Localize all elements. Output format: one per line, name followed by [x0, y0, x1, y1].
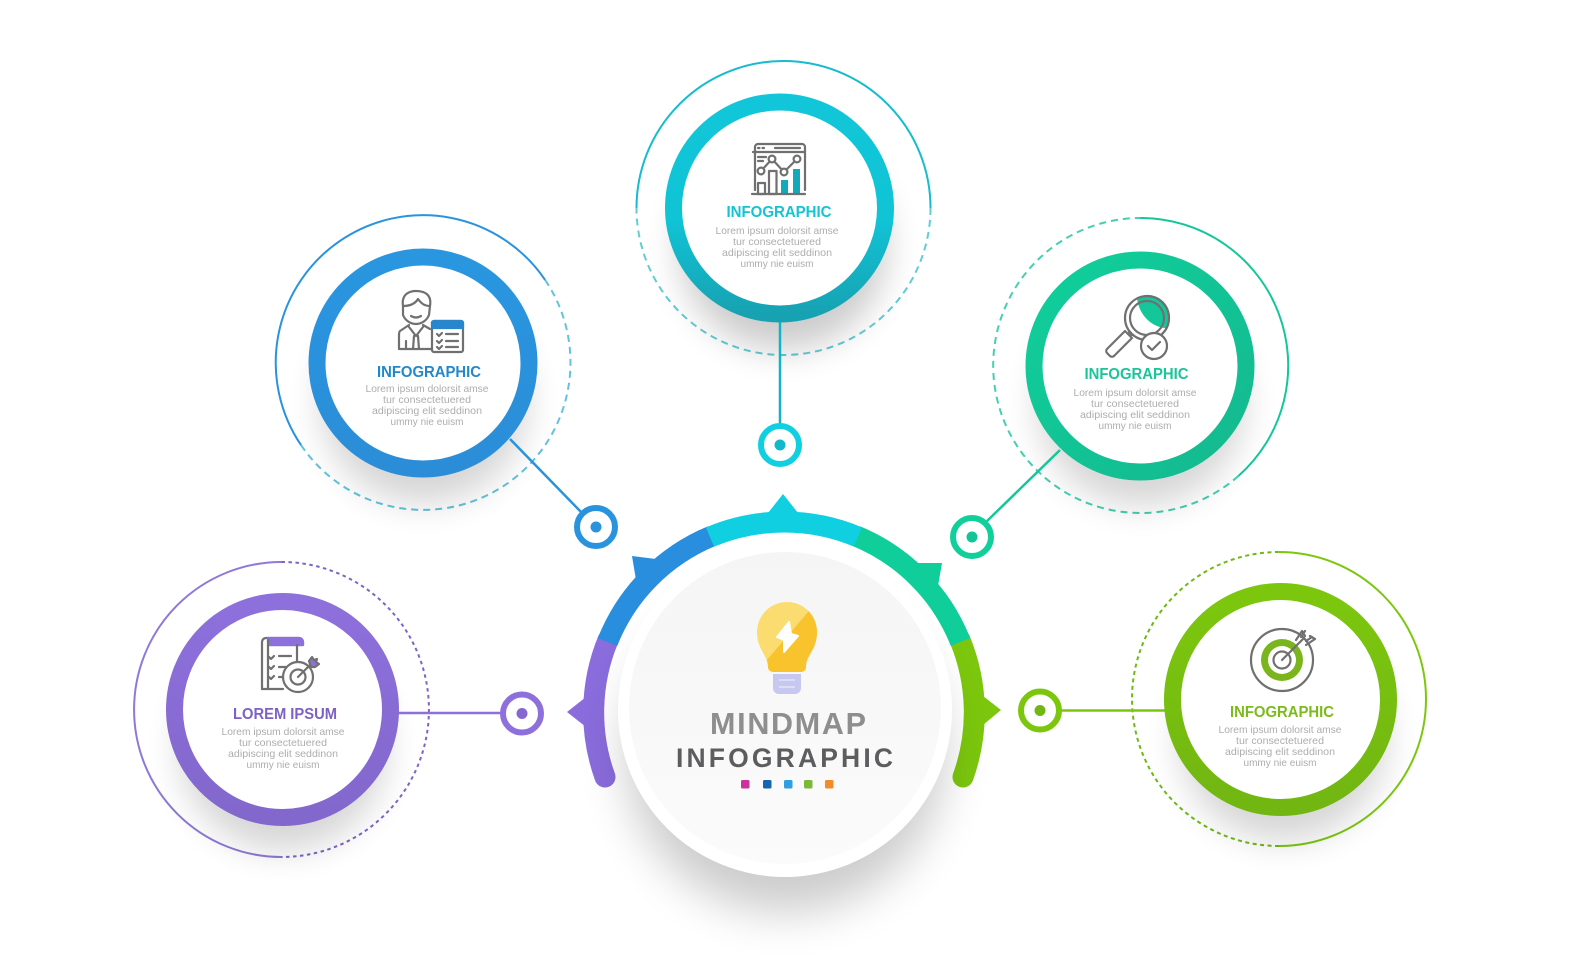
icon: magnifier with check	[1106, 295, 1170, 359]
text block: blue: ummy nie euism	[390, 417, 464, 428]
text block: lime: ummy nie euism	[1244, 758, 1316, 769]
shadow: cyan node	[679, 142, 887, 350]
text block: cyan: ummy nie euism	[740, 259, 814, 270]
outer orbit: green	[993, 218, 1288, 513]
panel: cyan node	[636, 61, 930, 464]
text block: lime: Lorem ipsum dolorsit amse	[1218, 725, 1342, 736]
ring: purple	[174, 602, 390, 818]
icon: web chart	[752, 144, 805, 194]
panel: lime node	[1021, 552, 1426, 846]
ring: cyan	[674, 102, 886, 314]
panel: central hub	[567, 494, 1001, 912]
text block: blue: adipiscing elit seddinon	[372, 406, 482, 417]
text block: cyan: tur consectetuered	[733, 237, 821, 248]
icon: light bulb	[757, 602, 817, 694]
hub shadow	[625, 592, 945, 912]
text block: blue: tur consectetuered	[383, 395, 471, 406]
text block: green: tur consectetuered	[1091, 399, 1179, 410]
text block: purple: adipiscing elit seddinon	[228, 749, 338, 760]
ring: lime	[1172, 592, 1388, 808]
heading: green: INFOGRAPHIC	[1084, 366, 1188, 383]
text block: lime	[1218, 725, 1342, 769]
text block: cyan	[716, 226, 839, 270]
shadow: lime node	[1179, 633, 1387, 841]
colour squares	[741, 780, 834, 788]
connector: cyan	[779, 320, 781, 425]
title: mindmap: MINDMAP	[710, 707, 866, 741]
outer orbit: lime	[1132, 552, 1426, 846]
text block: purple	[222, 727, 345, 771]
connector dot: lime	[1021, 692, 1059, 730]
connector dot: green	[953, 518, 991, 556]
panel: blue node	[276, 215, 615, 546]
ring: blue	[317, 257, 529, 469]
icon: target with arrow	[1251, 629, 1315, 691]
text block: blue: Lorem ipsum dolorsit amse	[366, 384, 489, 395]
text block: blue	[366, 384, 489, 428]
connector: blue	[510, 439, 582, 513]
shadow: green node	[1037, 298, 1245, 506]
text block: lime: tur consectetuered	[1236, 736, 1324, 747]
text block: green: adipiscing elit seddinon	[1080, 410, 1190, 421]
heading: lime: INFOGRAPHIC	[1230, 704, 1334, 721]
shadow: blue node	[320, 296, 528, 504]
connector dot: purple	[503, 694, 541, 732]
heading: blue: INFOGRAPHIC	[377, 364, 481, 381]
text block: lime: adipiscing elit seddinon	[1225, 747, 1335, 758]
title: infographic: INFOGRAPHIC	[676, 743, 893, 773]
text block: purple: tur consectetuered	[239, 738, 327, 749]
connector dot: cyan	[761, 426, 799, 464]
panel: purple node	[134, 562, 541, 857]
icon: businessman with checklist	[399, 291, 463, 352]
outer orbit: blue	[276, 215, 570, 510]
shadow: purple node	[179, 643, 387, 851]
text block: purple: ummy nie euism	[246, 760, 320, 771]
connector: lime	[1058, 709, 1166, 712]
text block: purple: Lorem ipsum dolorsit amse	[222, 727, 345, 738]
text block: green: ummy nie euism	[1098, 421, 1172, 432]
connector: green	[986, 450, 1060, 522]
outer orbit: purple	[134, 562, 429, 857]
ring: green	[1034, 260, 1246, 472]
icon: checklist with target	[262, 638, 319, 692]
connector: purple	[398, 712, 502, 714]
hub disc	[618, 543, 952, 877]
heading: cyan: INFOGRAPHIC	[726, 204, 832, 221]
connector dot: blue	[577, 508, 615, 546]
outer orbit: cyan	[636, 61, 930, 355]
segmented arc	[567, 494, 1001, 777]
panel: green node	[953, 218, 1288, 556]
heading: purple: LOREM IPSUM	[233, 706, 337, 723]
text block: green	[1074, 388, 1197, 432]
text block: cyan: adipiscing elit seddinon	[722, 248, 832, 259]
text block: green: Lorem ipsum dolorsit amse	[1074, 388, 1197, 399]
text block: cyan: Lorem ipsum dolorsit amse	[716, 226, 839, 237]
